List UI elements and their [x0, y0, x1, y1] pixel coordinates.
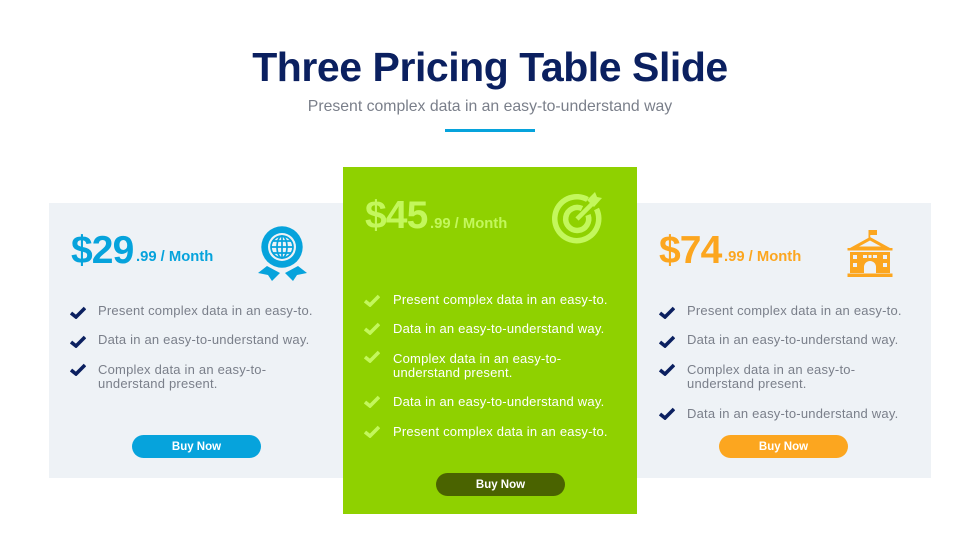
check: [659, 408, 675, 420]
feature text: [98, 362, 266, 391]
check: [364, 322, 380, 335]
icon: school building: [848, 230, 892, 277]
feature text: Present complex data in an easy-to.: [98, 303, 313, 318]
feature text: Data in an easy-to-understand way.: [393, 394, 604, 409]
feature text: [393, 351, 561, 380]
feature text: Complex data in an easy-to-: [98, 362, 266, 377]
check: [659, 364, 675, 376]
center button: Buy Now: [476, 479, 525, 491]
check: [364, 396, 380, 408]
check: [70, 364, 86, 376]
feature text: Present complex data in an easy-to.: [393, 292, 608, 307]
left price: $29: [71, 229, 133, 272]
feature text: Data in an easy-to-understand way.: [687, 406, 898, 421]
left button: Buy Now: [172, 441, 221, 453]
right price: $74: [659, 229, 721, 272]
right button: Buy Now: [759, 441, 808, 453]
title underline: [445, 129, 535, 132]
feature text: understand present.: [98, 376, 218, 391]
center price: $45: [365, 194, 427, 237]
check: [70, 306, 86, 319]
feature text: Present complex data in an easy-to.: [393, 424, 608, 439]
feature text: understand present.: [393, 365, 513, 380]
right per month: .99 / Month: [724, 249, 801, 265]
subtitle: Present complex data in an easy-to-understand way: [308, 98, 672, 115]
check: [70, 336, 86, 348]
check: [364, 350, 380, 363]
left features: [70, 303, 313, 391]
left button: [132, 435, 261, 458]
icon: globe badge: [258, 226, 307, 281]
center button: [436, 473, 565, 496]
center features: [364, 292, 608, 439]
right button: [719, 435, 848, 458]
feature text: Complex data in an easy-to-: [393, 351, 561, 366]
panel: center plan: [343, 167, 637, 514]
feature text: [687, 362, 855, 391]
panel: right plan: [637, 203, 931, 478]
check: [659, 336, 675, 348]
feature text: Data in an easy-to-understand way.: [687, 332, 898, 347]
check: [364, 426, 380, 438]
title: Three Pricing Table Slide: [252, 44, 728, 90]
feature text: Data in an easy-to-understand way.: [393, 321, 604, 336]
feature text: understand present.: [687, 376, 807, 391]
check: [364, 294, 380, 307]
feature text: Present complex data in an easy-to.: [687, 303, 902, 318]
center per month: .99 / Month: [430, 216, 507, 232]
icon: target with arrow: [552, 192, 602, 244]
panel: left plan: [49, 203, 343, 478]
left per month: .99 / Month: [136, 249, 213, 265]
right features: [659, 303, 902, 421]
feature text: Complex data in an easy-to-: [687, 362, 855, 377]
feature text: Data in an easy-to-understand way.: [98, 332, 309, 347]
check: [659, 306, 675, 319]
